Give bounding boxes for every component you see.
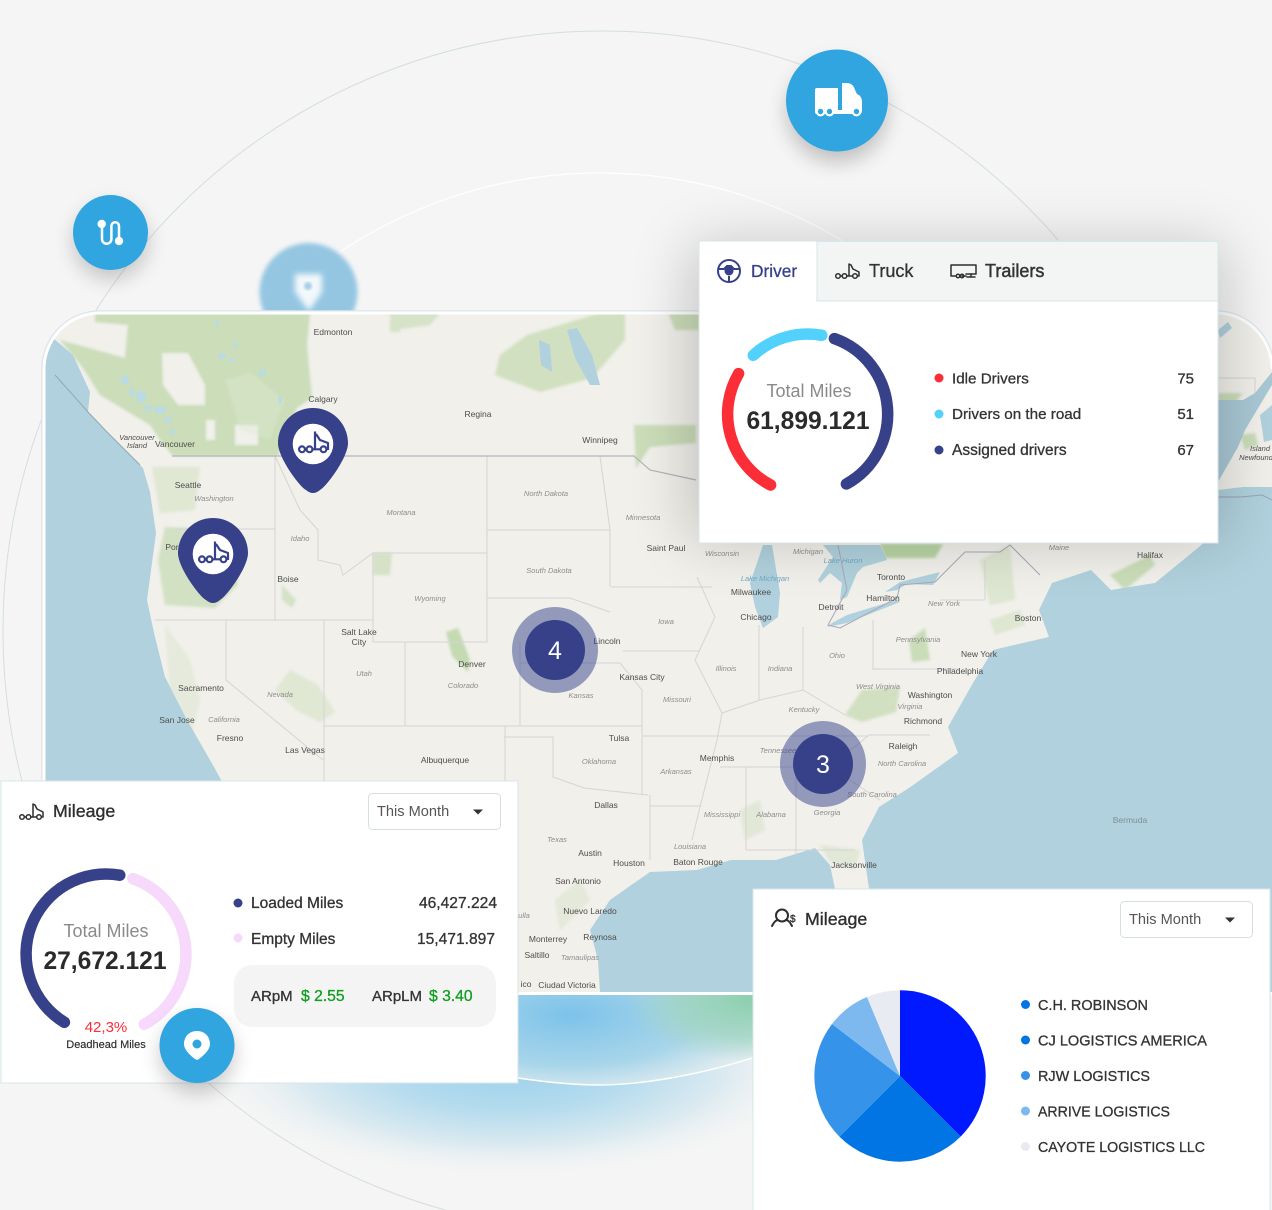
legend: carriers: CJ LOGISTICS AMERICA — [1038, 1034, 1207, 1050]
map city labels: Memphis — [700, 753, 734, 763]
map city labels: Georgia — [814, 808, 840, 817]
donut: total miles — [728, 334, 888, 485]
map marker: cluster of 3 — [780, 721, 866, 807]
orbit arc: inner ring — [133, 173, 1067, 1107]
map city labels: New York — [961, 649, 998, 659]
map city labels: North Dakota — [524, 489, 568, 498]
donut label: 61,899.121 — [746, 408, 870, 435]
map marker: cluster of 4 — [512, 607, 598, 693]
legend: mileage — [234, 895, 497, 948]
map city labels: South Dakota — [526, 566, 572, 575]
dropdown: this month — [1120, 902, 1252, 938]
map city labels: Idaho — [291, 534, 309, 543]
tab: driver — [718, 260, 797, 282]
dropdown: this month: This Month — [1129, 912, 1201, 928]
map city labels: Tennessee — [760, 746, 796, 755]
donut label — [43, 921, 167, 1051]
map city labels: Colorado — [448, 681, 478, 690]
map city labels: Indiana — [768, 664, 792, 673]
panel: mileage with deadhead — [1, 781, 518, 1083]
rates box: ARpLM — [372, 988, 422, 1005]
map city labels: Kentucky — [789, 705, 821, 714]
legend: driver status: Idle Drivers — [952, 370, 1029, 388]
donut label: 27,672.121 — [43, 948, 167, 975]
map city labels: Houston — [613, 858, 645, 868]
map city labels: Michigan — [793, 547, 823, 556]
rates box: $ 3.40 — [429, 988, 473, 1005]
map city labels: Por — [165, 542, 179, 552]
map city labels: ulla — [518, 911, 530, 920]
dropdown: this month — [368, 794, 500, 830]
map British Columbia lakes — [121, 320, 282, 435]
map city labels: Vancouver — [155, 439, 195, 449]
icon: location badge — [160, 1008, 234, 1092]
map city labels: Minnesota — [626, 513, 660, 522]
map city labels: South Carolina — [847, 790, 897, 799]
map water — [44, 322, 1272, 992]
rates box: ARpM — [251, 988, 293, 1005]
map city labels: Lake Michigan — [741, 574, 789, 583]
legend: carriers: RJW LOGISTICS — [1038, 1069, 1150, 1085]
dropdown: this month: This Month — [377, 804, 449, 820]
map city labels: Philadelphia — [937, 666, 983, 676]
map city labels: Wisconsin — [705, 549, 739, 558]
map city labels: Utah — [356, 669, 372, 678]
map city labels: Edmonton — [314, 327, 353, 337]
map vegetation — [60, 313, 1258, 930]
map city labels: Saint Paul — [647, 543, 685, 553]
map city labels: Lake Huron — [824, 556, 862, 565]
map city labels: Louisiana — [674, 842, 706, 851]
tab: truck — [836, 261, 914, 281]
map city labels: Montana — [386, 508, 416, 517]
map city labels: Dallas — [594, 800, 618, 810]
legend: driver status: Assigned drivers — [952, 442, 1067, 459]
map city labels: Calgary — [308, 394, 338, 404]
legend: carriers: ARRIVE LOGISTICS — [1038, 1104, 1170, 1120]
map city labels: Austin — [578, 848, 602, 858]
legend: driver status — [934, 370, 1194, 459]
map city labels: City — [352, 637, 367, 647]
map city labels: Chicago — [740, 612, 772, 622]
legend: mileage: Loaded Miles — [251, 895, 343, 912]
map city labels: Pennsylvania — [896, 635, 940, 644]
map city labels: West Virginia — [856, 682, 900, 691]
legend: mileage: Empty Miles — [251, 931, 336, 948]
map city labels: New York — [928, 599, 961, 608]
map city labels: Island — [127, 441, 148, 450]
map marker: cluster of 3: 3 — [816, 751, 830, 779]
map city labels: Washington — [194, 494, 234, 503]
map city labels: Vancouver — [119, 433, 155, 442]
tab: trailers: Trailers — [985, 261, 1044, 281]
map city labels: Iowa — [658, 617, 674, 626]
map city labels: Baton Rouge — [673, 857, 723, 867]
pie chart — [814, 990, 986, 1162]
map city labels: Illinois — [716, 664, 737, 673]
map city labels: Wyoming — [414, 594, 446, 603]
map city labels: Nevada — [267, 690, 293, 699]
tab: trailers — [951, 261, 1044, 281]
map city labels: Detroit — [818, 602, 844, 612]
map city labels: Halifax — [1137, 550, 1164, 560]
map city labels: Denver — [458, 659, 486, 669]
heading: mileage — [772, 909, 867, 929]
map city labels: Albuquerque — [421, 755, 469, 765]
map city labels: Kansas — [568, 691, 594, 700]
tab: truck: Truck — [869, 261, 914, 281]
map city labels: Saltillo — [524, 950, 550, 960]
map city labels: Maine — [1049, 543, 1069, 552]
map city labels: San Antonio — [555, 876, 601, 886]
rates box — [234, 965, 496, 1027]
map city labels: Sacramento — [178, 683, 224, 693]
panel: mileage by carrier — [753, 889, 1270, 1210]
heading: mileage — [20, 801, 115, 821]
donut label: 42,3% — [85, 1019, 127, 1036]
panel: driver stats — [699, 241, 1218, 543]
blurred globe glow below map — [258, 995, 752, 1160]
map city labels: Arkansas — [659, 767, 692, 776]
map city labels: Oklahoma — [582, 757, 616, 766]
legend: driver status: 67 — [1177, 442, 1194, 459]
legend: driver status: 75 — [1177, 370, 1194, 388]
map panel — [42, 311, 1272, 995]
legend: carriers: CAYOTE LOGISTICS LLC — [1038, 1140, 1205, 1156]
donut label: Total Miles — [766, 381, 852, 401]
map city labels: Monterrey — [529, 934, 568, 944]
map city labels: Missouri — [663, 695, 691, 704]
legend: mileage: 15,471.897 — [417, 931, 495, 948]
map city labels: Winnipeg — [582, 435, 618, 445]
map city labels: Milwaukee — [731, 587, 771, 597]
map city labels: Island — [1250, 444, 1271, 453]
map city labels: Ohio — [829, 651, 845, 660]
legend: carriers — [1021, 998, 1207, 1156]
map city labels: Ciudad Victoria — [538, 980, 596, 990]
map city labels: Richmond — [904, 716, 942, 726]
map city labels: Hamilton — [866, 593, 900, 603]
map city labels: Regina — [465, 409, 492, 419]
map city labels: California — [208, 715, 240, 724]
map city labels: Raleigh — [889, 741, 918, 751]
map city labels: North Carolina — [878, 759, 926, 768]
tab bar — [817, 242, 1218, 301]
map land — [44, 313, 1272, 993]
map city labels: Jacksonville — [831, 860, 877, 870]
driver panel shadow — [690, 245, 1225, 540]
map pin: truck west — [178, 518, 248, 603]
donut label: Total Miles — [63, 921, 149, 941]
map city labels: Tamaulipas — [561, 953, 599, 962]
map city labels: Bermuda — [1113, 815, 1148, 825]
map city labels: Salt Lake — [341, 627, 377, 637]
map city labels: Newfound — [1239, 453, 1272, 462]
map city labels: Texas — [547, 835, 567, 844]
map city labels: Boston — [1015, 613, 1042, 623]
heading: mileage: $ — [790, 914, 796, 925]
map city labels: Virginia — [898, 702, 922, 711]
map city labels: Nuevo Laredo — [563, 906, 617, 916]
map city labels: Washington — [908, 690, 953, 700]
map city labels: Lincoln — [594, 636, 621, 646]
map city labels: Kansas City — [619, 672, 665, 682]
legend: driver status: 51 — [1177, 406, 1194, 423]
map city labels: Mississippi — [704, 810, 740, 819]
donut label — [746, 381, 870, 435]
map city labels: Las Vegas — [285, 745, 325, 755]
map city labels: Seattle — [175, 480, 202, 490]
map marker: cluster of 4: 4 — [548, 637, 562, 665]
map city labels: ico — [521, 979, 532, 989]
map city labels: Reynosa — [583, 932, 617, 942]
map city labels — [119, 327, 1272, 990]
rates box: $ 2.55 — [301, 988, 345, 1005]
donut: loaded and empty miles — [26, 874, 186, 1024]
blurred location badge behind map — [256, 240, 360, 310]
heading: mileage: Mileage — [805, 909, 867, 929]
icon: truck badge — [786, 50, 888, 162]
legend: mileage: 46,427.224 — [419, 895, 497, 912]
map state borders — [55, 375, 1272, 860]
map city labels: Toronto — [877, 572, 905, 582]
heading: mileage: Mileage — [53, 801, 115, 821]
icon: route badge — [73, 195, 148, 279]
map city labels: Tulsa — [609, 733, 630, 743]
map city labels: San Jose — [159, 715, 195, 725]
map city labels: Alabama — [755, 810, 786, 819]
map city labels: Boise — [277, 574, 299, 584]
legend: driver status: Drivers on the road — [952, 406, 1081, 423]
tab: driver: Driver — [751, 261, 797, 281]
donut label: Deadhead Miles — [66, 1039, 146, 1051]
map city labels: Fresno — [217, 733, 243, 743]
legend: carriers: C.H. ROBINSON — [1038, 998, 1148, 1014]
map pin: truck north — [278, 408, 348, 493]
